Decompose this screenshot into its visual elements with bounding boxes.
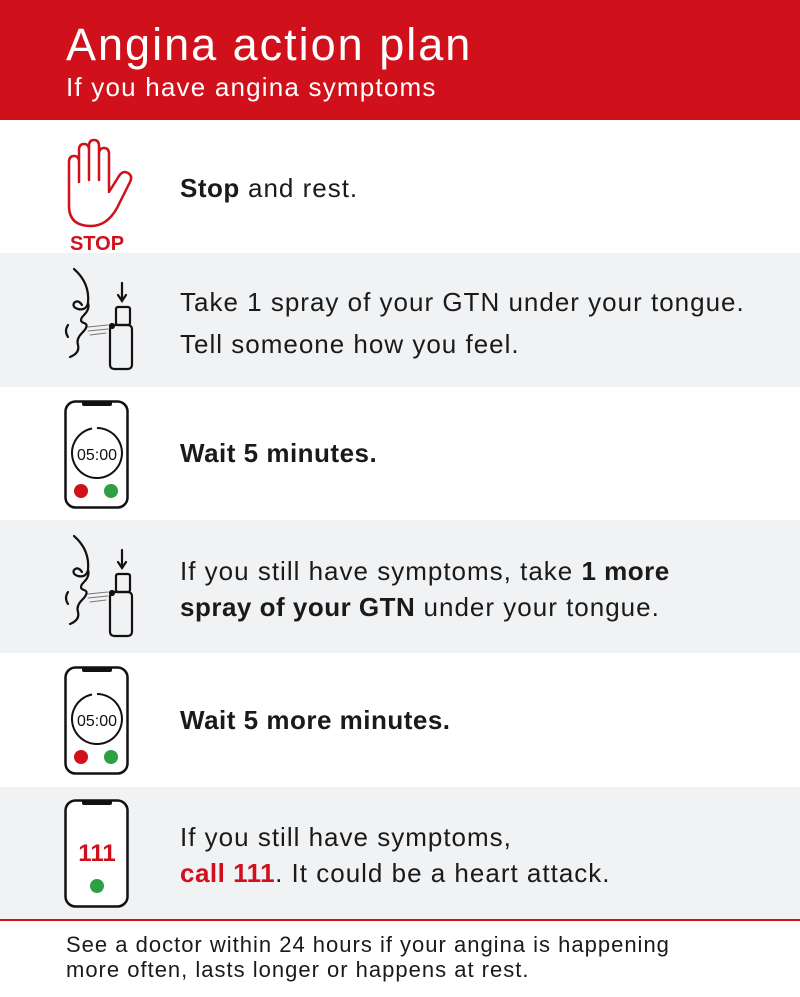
text: second spray: spray of your GTN under your tongue. xyxy=(180,592,660,622)
text: wait 5 minutes: Wait 5 minutes. xyxy=(180,438,377,468)
text: second spray: If you still have symptoms, take 1 more xyxy=(180,556,670,586)
icon: phone 111: 111 xyxy=(78,840,116,867)
step 1: stop xyxy=(68,138,358,252)
icon: timer phone xyxy=(64,666,129,775)
footer note: more often, lasts longer or happens at rest. xyxy=(66,957,529,982)
text: stop and rest: Stop and rest. xyxy=(180,173,358,203)
icon: timer phone: 05:00 xyxy=(77,447,117,464)
icon: timer phone: 05:00 xyxy=(77,713,117,730)
text: call 111: If you still have symptoms, xyxy=(180,822,512,852)
step 6: call 111 xyxy=(0,787,800,920)
icon: spray xyxy=(64,268,134,370)
step 3: wait 5 minutes xyxy=(64,400,377,509)
text: spray instructions xyxy=(180,287,745,359)
icon: spray xyxy=(64,534,134,638)
header banner xyxy=(0,0,800,120)
text: call 111 xyxy=(180,822,611,888)
icon: timer phone xyxy=(64,400,129,509)
subtitle: If you have angina symptoms xyxy=(66,72,437,102)
text: call 111: call 111. It could be a heart attack. xyxy=(180,858,611,888)
step 2: spray xyxy=(0,253,800,387)
title: Angina action plan xyxy=(66,19,472,70)
step 4: second spray xyxy=(0,520,800,653)
text: second spray xyxy=(180,556,670,622)
text: spray instructions: Tell someone how you feel. xyxy=(180,329,520,359)
text: spray instructions: Take 1 spray of your GTN under your tongue. xyxy=(180,287,745,317)
text: wait 5 more minutes: Wait 5 more minutes. xyxy=(180,705,451,735)
step 5: wait 5 more minutes xyxy=(64,666,451,775)
footer note: See a doctor within 24 hours if your angina is happening xyxy=(66,932,670,957)
icon: phone 111 xyxy=(64,799,129,908)
icon: stop hand xyxy=(68,138,132,252)
footer note xyxy=(66,932,670,982)
red divider xyxy=(0,919,800,921)
